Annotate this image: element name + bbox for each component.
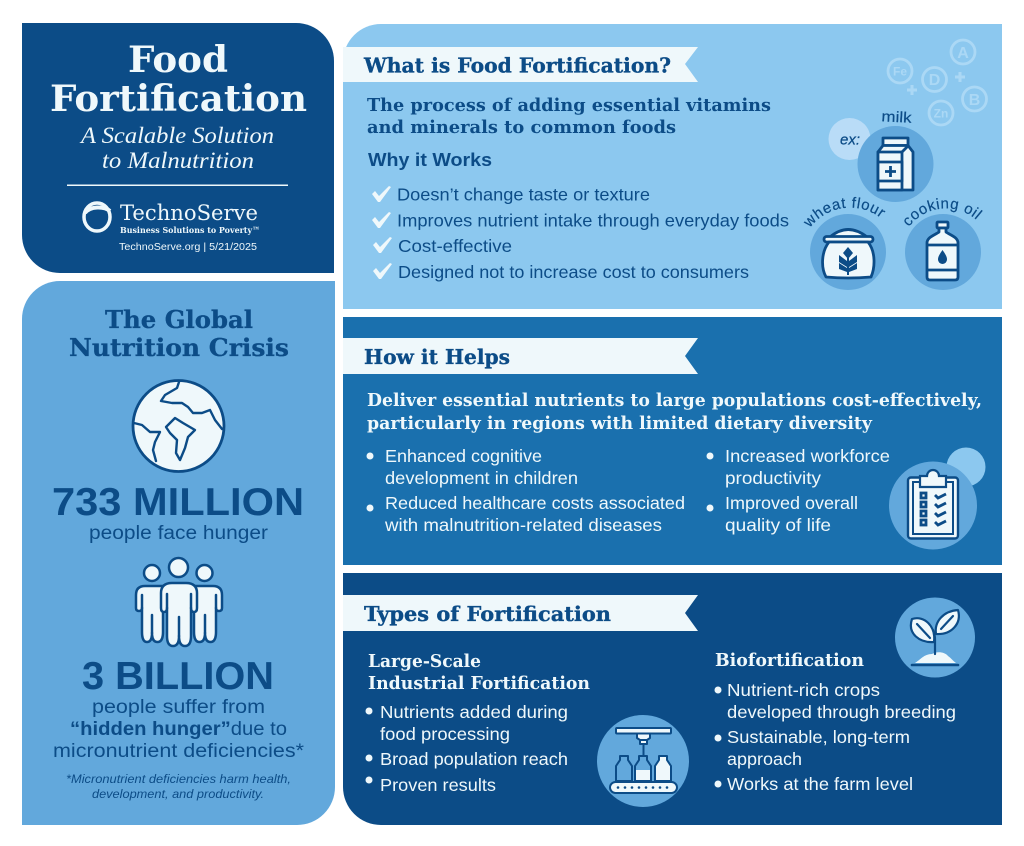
column: industrial: Nutrients added during: [380, 702, 568, 722]
definition text: [367, 95, 771, 138]
icon: globe: [133, 380, 224, 472]
panel: The Global Nutrition Crisis: [22, 281, 335, 825]
checklist: Improves nutrient intake through everyday foods: [397, 210, 789, 230]
benefits list: quality of life: [725, 515, 831, 535]
icon: milk: milk: [881, 108, 912, 127]
check icons: [372, 186, 392, 279]
column: biofortification: developed through breeding: [727, 702, 956, 722]
column: biofortification: [714, 650, 956, 794]
stat: 3 billion: [53, 655, 305, 762]
icon: logo mark: [84, 203, 110, 231]
checklist: Designed not to increase cost to consumers: [398, 262, 749, 282]
icon: milk: [828, 108, 934, 202]
benefits list: [366, 446, 890, 535]
ribbon heading: [343, 47, 698, 82]
heading: Food Fortification: [50, 39, 307, 120]
stat: 3 billion: people suffer from: [92, 697, 265, 718]
heading: Food Fortification: Fortification: [50, 78, 307, 120]
icon: cooking oil: [904, 198, 983, 290]
heading: Food Fortification: Food: [128, 39, 228, 81]
icon: milk: ex:: [840, 132, 860, 148]
icon: wheat flour: wheat flour: [804, 196, 886, 226]
icon: wheat flour: [804, 196, 886, 290]
icon: vitamins: A: [957, 45, 969, 62]
icon: vitamins: [888, 40, 986, 125]
benefits list: productivity: [725, 468, 821, 488]
logo: TechnoServe: Business Solutions to Poverty™: [120, 226, 260, 236]
heading: global crisis: Nutrition Crisis: [69, 333, 289, 362]
panel: Types of Fortification: [343, 573, 1002, 825]
checklist: [372, 184, 789, 282]
summary text: particularly in regions with limited dietary diversity: [367, 413, 873, 434]
panel: title: [22, 23, 334, 273]
icon: clipboard: [889, 448, 986, 550]
panel: How it Helps: [343, 317, 1002, 565]
stat: 3 billion: 3 BILLION: [82, 655, 274, 698]
ribbon heading: Types of Fortification: [364, 602, 611, 626]
footnote: development, and productivity.: [92, 787, 264, 801]
panel: What is Food Fortification?: [343, 24, 1002, 309]
icon: people: [136, 558, 222, 646]
subheading: Why it Works: Why it Works: [368, 149, 492, 170]
stat: 3 billion: “hidden hunger” due to: [70, 719, 287, 740]
logo: TechnoServe: TechnoServe: [120, 201, 258, 225]
ribbon heading: [343, 595, 698, 631]
definition text: The process of adding essential vitamins: [367, 95, 771, 116]
logo: TechnoServe: TechnoServe.org | 5/21/2025: [119, 242, 257, 253]
icon: vitamins: B: [969, 92, 980, 109]
benefits list: Enhanced cognitive: [385, 446, 542, 466]
benefits list: Improved overall: [725, 493, 858, 513]
definition text: and minerals to common foods: [367, 117, 676, 138]
stat: 3 billion: micronutrient deficiencies*: [53, 741, 305, 762]
checklist: Cost-effective: [398, 236, 512, 256]
benefits list: with malnutrition-related diseases: [384, 515, 662, 535]
column: industrial: [366, 651, 590, 795]
summary text: Deliver essential nutrients to large populations cost-effectively,: [367, 390, 982, 411]
column: industrial: Large-Scale: [368, 651, 481, 672]
stat: 733 million: 733 MILLION: [52, 481, 304, 524]
stat: 733 million: people face hunger: [89, 523, 269, 544]
column: industrial: Proven results: [380, 775, 496, 795]
ribbon heading: What is Food Fortification?: [363, 54, 671, 78]
subtitle: to Malnutrition: [102, 148, 254, 173]
column: industrial: Broad population reach: [380, 749, 568, 769]
heading: global crisis: The Global: [105, 305, 253, 334]
logo: TechnoServe: [84, 201, 260, 253]
wheat mark: [839, 247, 857, 275]
benefits list: development in children: [385, 468, 578, 488]
column: biofortification: Biofortification: [715, 650, 864, 671]
stat: 733 million: [52, 481, 304, 544]
benefits list: Increased workforce: [725, 446, 890, 466]
subtitle: [79, 123, 274, 173]
benefits list: Reduced healthcare costs associated: [385, 493, 685, 513]
checklist: Doesn’t change taste or texture: [397, 184, 650, 204]
icon: vitamins: D: [929, 72, 940, 89]
icon: vitamins: Zn: [934, 106, 948, 120]
column: industrial: Industrial Fortification: [368, 673, 590, 694]
footnote: [66, 772, 291, 801]
icon: sprout: [895, 598, 975, 678]
ribbon heading: How it Helps: [364, 345, 510, 369]
column: biofortification: Works at the farm level: [727, 774, 913, 794]
summary text: [367, 390, 982, 434]
subtitle: A Scalable Solution: [79, 123, 274, 148]
column: industrial: food processing: [380, 724, 510, 744]
ribbon heading: [343, 338, 698, 374]
column: biofortification: Nutrient-rich crops: [727, 680, 880, 700]
icon: vitamins: Fe: [893, 64, 907, 78]
heading: global crisis: [69, 305, 289, 362]
icon: factory line: [597, 715, 689, 807]
footnote: *Micronutrient deficiencies harm health,: [66, 772, 291, 786]
column: biofortification: Sustainable, long-term: [727, 727, 910, 747]
column: biofortification: approach: [727, 749, 802, 769]
icon: cooking oil: cooking oil: [904, 198, 983, 226]
